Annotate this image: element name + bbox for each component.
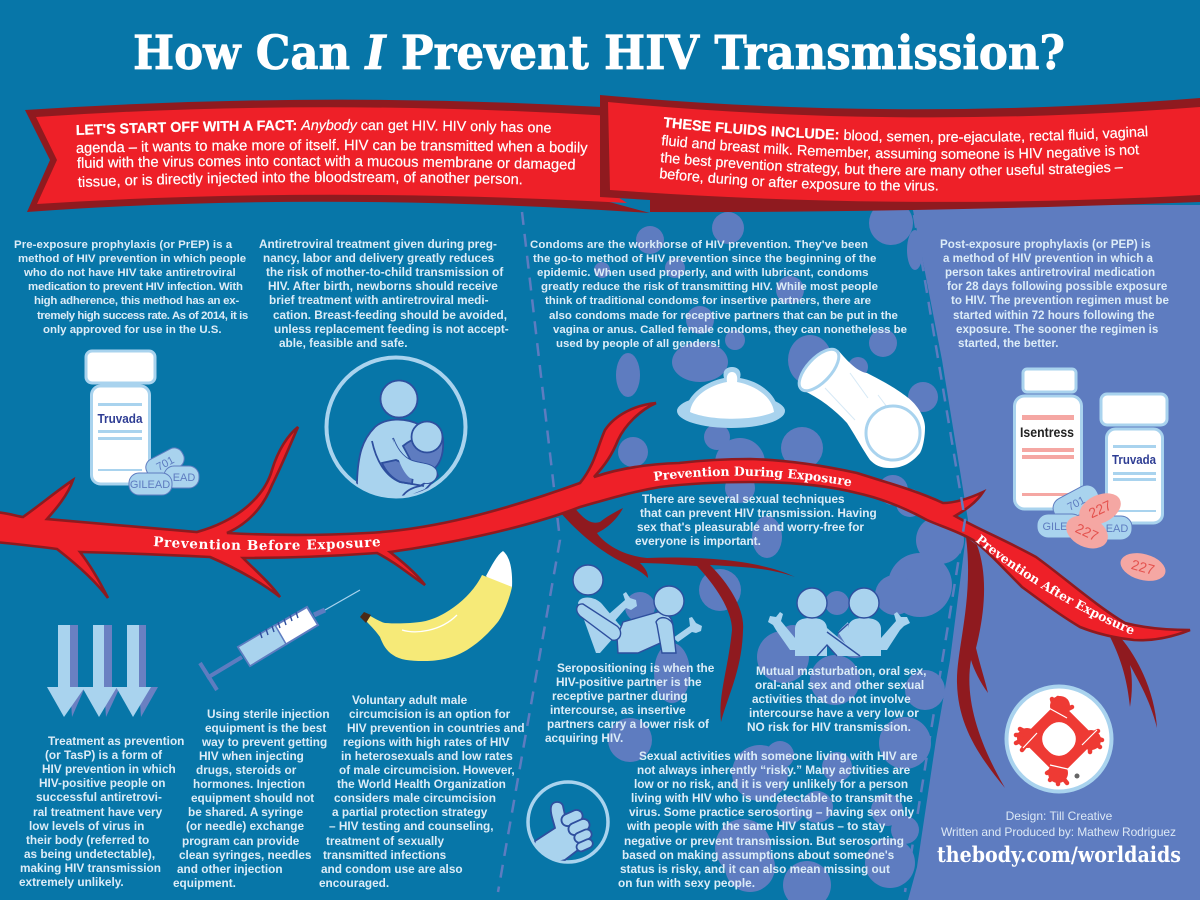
text: antiretroviral treatment in pregnancy: able, feasible and safe. (279, 336, 408, 350)
text: PrEP: Pre-exposure prophylaxis (or PrEP) is a (14, 239, 233, 251)
text: seropositioning: intercourse, as insertive (550, 703, 686, 717)
text: sterile injection: equipment should not (191, 791, 314, 805)
label: Prevention During Exposure: Prevention During Exposure (653, 466, 852, 486)
text: circumcision: the World Health Organization (337, 777, 506, 791)
text: TasP: as being undetectable), (24, 847, 155, 861)
right panel: after exposure background (908, 205, 1200, 900)
text: sterile injection: clean syringes, needles (179, 848, 312, 862)
icon: Isentress and Truvada bottles with pills: 701 (1066, 494, 1087, 513)
ribbon: fluids: fluid and breast milk. Remember, assuming someone is HIV negative is not (662, 134, 1140, 162)
credits (937, 809, 1181, 867)
text: antiretroviral treatment in pregnancy: cation. Breast-feeding should be avoided, (273, 308, 507, 322)
text: antiretroviral treatment in pregnancy: nancy, labor and delivery greatly reduces (263, 251, 495, 265)
icon: Truvada bottle with pills: 701 (155, 454, 176, 473)
text: circumcision: transmitted infections (323, 848, 447, 862)
text: TasP: (or TasP) is a form of (45, 748, 162, 762)
text: sterile injection: Using sterile injection (207, 707, 330, 721)
text: circumcision: a partial protection strategy (332, 805, 488, 819)
text: sexual activities with someone living with HIV: living with HIV who is undetectable to transmit the (631, 791, 913, 805)
text: sterile injection: hormones. Injection (193, 777, 305, 791)
text: seropositioning: HIV-positive partner is the (556, 675, 702, 689)
text: circumcision: circumcision is an option for (349, 707, 511, 721)
icon: thumbs up (528, 782, 608, 870)
ribbon: fact (25, 100, 650, 213)
credits: Written and Produced by: Mathew Rodriguez (941, 825, 1176, 839)
text: antiretroviral treatment in pregnancy: the risk of mother-to-child transmission of (266, 265, 503, 279)
text: sterile injection: (or needle) exchange (186, 819, 304, 833)
icon: Truvada bottle with pills: Truvada (98, 411, 143, 426)
vein branch: after exposure left (957, 537, 1005, 788)
text: PEP: to HIV. The prevention regimen must be (951, 294, 1170, 307)
text: circumcision: Voluntary adult male (352, 693, 468, 707)
icon: Isentress and Truvada bottles with pills: Isentress (1020, 424, 1074, 440)
text: PEP: exposure. The sooner the regimen is (956, 323, 1158, 336)
label: Prevention After Exposure: Prevention After Exposure (976, 534, 1134, 634)
text: sexual activities with someone living with HIV: with people with the same HIV status – to stay (626, 819, 886, 833)
text: PrEP: high adherence, this method has an ex- (34, 295, 239, 307)
icon: Isentress and Truvada bottles with pills: EAD (1106, 523, 1128, 535)
text: PrEP: only approved for use in the U.S. (43, 324, 222, 336)
ribbon: fact: agenda – it wants to make more of itself. HIV can be transmitted when a bodily (76, 138, 588, 156)
text: PEP: for 28 days following possible exposure (947, 280, 1168, 293)
text: sterile injection: drugs, steroids or (196, 763, 297, 777)
text: circumcision: of male circumcision. However, (339, 763, 515, 777)
text: sterile injection: and other injection (177, 862, 283, 876)
text: sterile injection: program can provide (182, 834, 300, 848)
text: sexual activities with someone living with HIV: not always inherently “risky.” Many activities are (637, 763, 911, 777)
icon: Truvada bottle with pills (86, 351, 199, 495)
text: TasP: HIV prevention in which (42, 762, 176, 776)
text: mutual masturbation: intercourse have a very low or (749, 706, 919, 720)
text: sterile injection: way to prevent getting (201, 735, 327, 749)
text: circumcision: and condom use are also (321, 862, 463, 876)
text: PrEP: method of HIV prevention in which people (18, 253, 246, 265)
text: condoms: epidemic. When used properly, and with lubricant, condoms (537, 267, 869, 279)
text: PEP: Post-exposure prophylaxis (or PEP) is (940, 238, 1151, 251)
text: seropositioning: Seropositioning is when the (557, 661, 715, 675)
text: sexual activities with someone living with HIV: low or no risk, and it is very unlikely for a person (634, 777, 908, 791)
text: sexual activities with someone living with HIV: status is risky, and it can also mean missing out (620, 862, 890, 876)
text: sexual techniques intro: that can prevent HIV transmission. Having (640, 506, 877, 520)
text: condoms: think of traditional condoms for insertive partners, there are (545, 295, 871, 307)
text: TasP: extremely unlikely. (19, 875, 124, 889)
text: sexual techniques intro: everyone is important. (635, 534, 761, 548)
text: PrEP: tremely high success rate. As of 2014, it is (37, 310, 248, 322)
text: seropositioning: receptive partner during (552, 689, 688, 703)
text: TasP: successful antiretrovi- (36, 790, 162, 804)
icon: female condom (792, 343, 925, 468)
text: condoms: used by people of all genders! (556, 338, 721, 350)
text: PEP: started within 72 hours following the (953, 309, 1155, 322)
text: sexual activities with someone living with HIV: on fun with sexy people. (618, 876, 755, 890)
icon: seropositioning figures (573, 565, 702, 653)
ribbon: fact: LET'S START OFF WITH A FACT: Anybody can get HIV. HIV only has one (76, 118, 551, 136)
icon: arrows (47, 625, 158, 717)
text: condoms: greatly reduce the risk of transmitting HIV. While most people (541, 281, 878, 293)
text: condoms: the go-to method of HIV prevention since the beginning of the (533, 253, 876, 265)
text: TasP: HIV-positive people on (39, 776, 166, 790)
text: circumcision: HIV prevention in countries and (347, 721, 525, 735)
label: Prevention Before Exposure: Prevention Before Exposure (154, 536, 380, 552)
text: sterile injection: HIV when injecting (199, 749, 304, 763)
text: sexual activities with someone living with HIV: virus. Some practice serosorting – having sex only (629, 805, 915, 819)
icon: Isentress and Truvada bottles with pills: 227 (1130, 556, 1157, 578)
ink splatter blobs (594, 201, 964, 900)
dashed divider: before / during (498, 212, 560, 892)
ribbon: fact: fluid with the virus comes into contact with a mucous membrane or damaged (76, 155, 575, 172)
text: sexual activities with someone living with HIV: based on making assumptions about someone's (622, 848, 895, 862)
icon: Isentress and Truvada bottles with pills: 227 (1073, 520, 1101, 544)
title: How Can I Prevent HIV Transmission? (133, 26, 1065, 81)
vein branch: lower sexual techniques (560, 506, 795, 722)
text: antiretroviral treatment in pregnancy: unless replacement feeding is not accept- (274, 322, 509, 336)
text: circumcision: considers male circumcision (334, 791, 496, 805)
ribbon: fact: tissue, or is directly injected into the bloodstream, of another person. (78, 170, 522, 188)
text: sexual techniques intro: There are several sexual techniques (642, 492, 845, 506)
icon: Isentress and Truvada bottles with pills: Truvada (1112, 452, 1157, 467)
text: condoms: also condoms made for receptive partners that can be put in the (549, 310, 898, 322)
text: condoms: Condoms are the workhorse of HIV prevention. They've been (530, 239, 868, 251)
icon: dental dam condom (677, 367, 785, 428)
text: circumcision: encouraged. (319, 876, 389, 890)
icon: syringe (200, 590, 360, 690)
text: circumcision: regions with high rates of HIV (343, 735, 510, 749)
text: sterile injection: be shared. A syringe (188, 805, 304, 819)
text: TasP: ral treatment have very (33, 805, 163, 819)
text: mutual masturbation: Mutual masturbation, oral sex, (756, 664, 926, 678)
text: sexual activities with someone living with HIV: negative or prevent transmission. But serosorting (624, 834, 904, 848)
text: PEP: started, the better. (958, 337, 1059, 350)
text: TasP: Treatment as prevention (48, 734, 184, 748)
icon: mutual masturbation figures (768, 588, 910, 656)
text: circumcision: in heterosexuals and low rates (341, 749, 513, 763)
text: seropositioning: acquiring HIV. (545, 731, 623, 745)
text: TasP: their body (referred to (26, 833, 149, 847)
text: PEP: a method of HIV prevention in which a (943, 252, 1154, 265)
text: sexual activities with someone living with HIV: Sexual activities with someone living with HIV are (639, 749, 918, 763)
text: sterile injection: equipment. (173, 876, 236, 890)
text: mutual masturbation: NO risk for HIV transmission. (747, 720, 911, 734)
credits: Design: Till Creative (1006, 809, 1113, 823)
text: antiretroviral treatment in pregnancy: Antiretroviral treatment given during preg- (259, 237, 497, 251)
text: circumcision: – HIV testing and counseling, (329, 819, 494, 833)
logo: linked hands ring (1006, 686, 1112, 792)
icon: banana with condom (360, 551, 512, 661)
main vein (0, 403, 1190, 640)
ribbon: fluids: THESE FLUIDS INCLUDE: blood, semen, pre-ejaculate, rectal fluid, vaginal (664, 117, 1148, 145)
icon: Truvada bottle with pills: GILEAD (130, 479, 170, 491)
ribbon: fluids: before, during or after exposure to the virus. (660, 168, 938, 192)
text: PrEP: medication to prevent HIV infection. With (28, 281, 243, 293)
ribbon: fluids (600, 95, 1200, 212)
text: mutual masturbation: oral-anal sex and other sexual (755, 678, 924, 692)
text: seropositioning: partners carry a lower risk of (547, 717, 709, 731)
text: mutual masturbation: activities that do not involve (752, 692, 911, 706)
text: PrEP: who do not have HIV take antiretroviral (23, 267, 236, 279)
text: condoms: vagina or anus. Called female condoms, they can nonetheless be (553, 324, 907, 336)
text: TasP: making HIV transmission (20, 861, 161, 875)
ribbon: fluids: the best prevention strategy, but there are many other useful strategies – (660, 152, 1123, 178)
icon: Isentress and Truvada bottles with pills: GILE (1042, 521, 1068, 533)
text: antiretroviral treatment in pregnancy: HIV. After birth, newborns should receive (268, 279, 498, 293)
text: TasP: low levels of virus in (29, 819, 144, 833)
icon: mother holding baby (326, 358, 466, 505)
vein branch: after exposure right (1108, 633, 1157, 728)
icon: Isentress and Truvada bottles with pills (1014, 369, 1169, 586)
text: PEP: person takes antiretroviral medication (945, 266, 1155, 279)
text: antiretroviral treatment in pregnancy: brief treatment with antiretroviral medi- (269, 293, 489, 307)
text: sterile injection: equipment is the best (205, 721, 326, 735)
icon: Truvada bottle with pills: EAD (173, 472, 195, 484)
icon: Isentress and Truvada bottles with pills: 227 (1086, 497, 1114, 521)
dashed divider: during / after (905, 215, 965, 892)
text: circumcision: treatment of sexually (326, 834, 444, 848)
credits: thebody.com/worldaids (937, 842, 1181, 867)
text: sexual techniques intro: sex that's pleasurable and worry-free for (637, 520, 864, 534)
